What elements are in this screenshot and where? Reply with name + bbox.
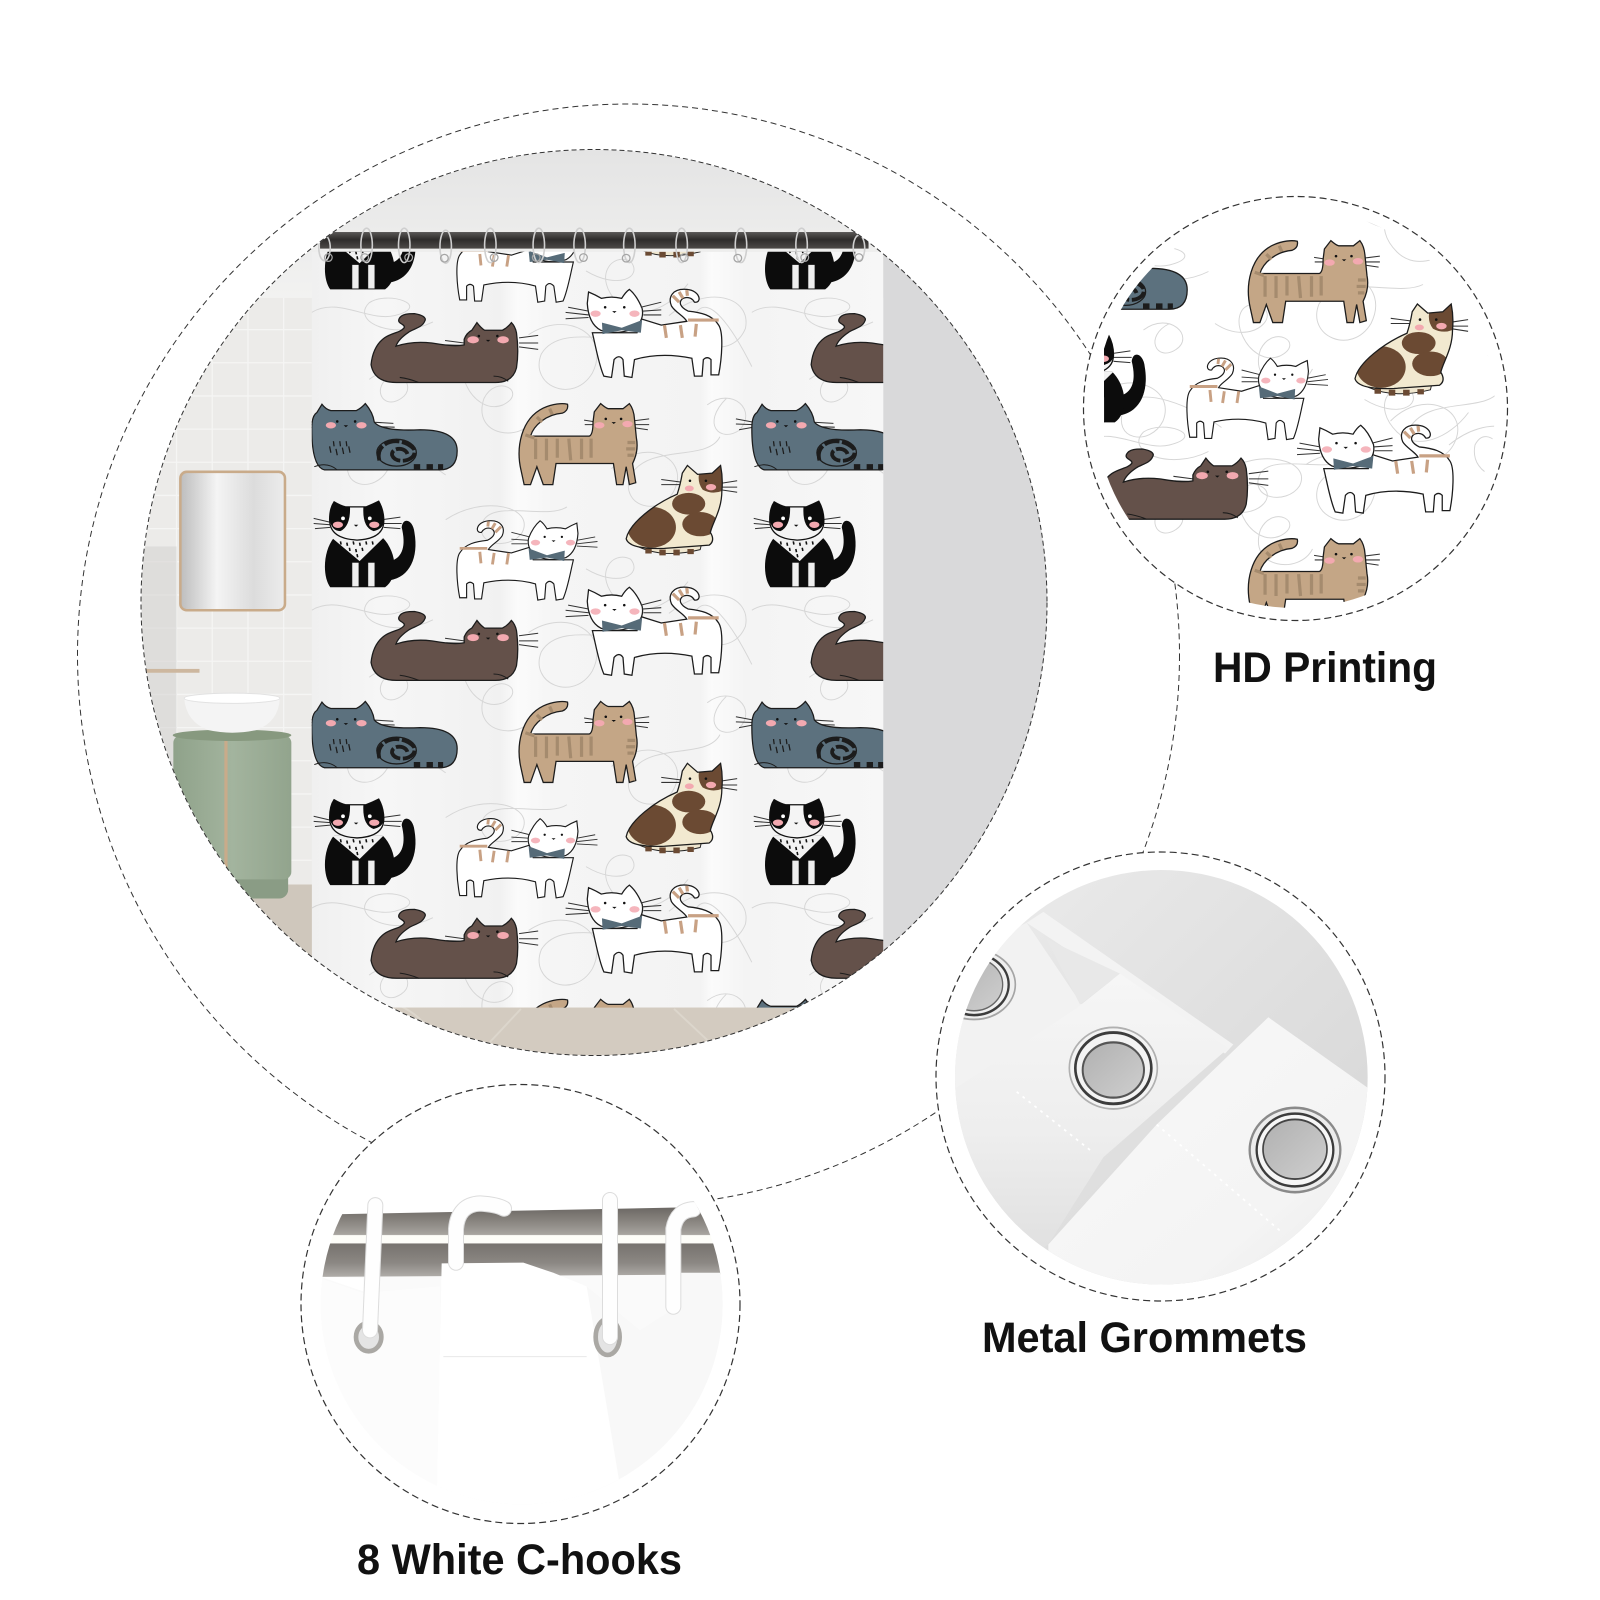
cats: calico <box>626 168 737 853</box>
grommet right <box>1250 1108 1340 1192</box>
grommet close-up photo <box>933 866 1373 1288</box>
middle flap <box>956 980 1223 1190</box>
connector: large dashed circle <box>78 104 1180 1206</box>
grommet circle outline <box>936 852 1385 1301</box>
white C-hooks <box>370 1200 693 1337</box>
cats: grey lying <box>296 404 897 1066</box>
curtain white background <box>317 1273 730 1509</box>
photo: tiled wall <box>142 298 312 884</box>
front flap <box>1048 1017 1373 1288</box>
hook circle outline <box>301 1084 740 1524</box>
metal rod <box>317 1207 727 1277</box>
panel: metal grommets <box>933 852 1385 1301</box>
photo: grey right wall <box>883 254 1048 951</box>
stitching <box>1017 1092 1283 1234</box>
grommet left <box>963 954 1016 1020</box>
fabric wedge <box>1066 948 1120 1004</box>
HD printed cats <box>1104 222 1494 608</box>
photo: mirror <box>180 472 285 610</box>
folded band <box>1027 912 1233 1054</box>
cats: brown lying <box>371 314 978 978</box>
HD circle outline <box>1084 196 1508 620</box>
label: 8 White C-hooks: 8 White C-hooks <box>357 1536 682 1584</box>
scribble background pattern <box>312 259 1192 1139</box>
cats: white facing right <box>457 223 597 898</box>
metal grommets on curtain <box>356 1319 620 1355</box>
photo: floor <box>240 884 797 1056</box>
label: HD Printing: HD Printing <box>1213 644 1437 692</box>
photo: green vanity <box>173 730 291 899</box>
panel: main curtain photo <box>140 149 1048 1056</box>
curtain folds <box>441 1262 720 1357</box>
grommet middle <box>1069 1027 1157 1109</box>
photo: white sink bowl <box>184 693 280 733</box>
cats: tan striped <box>519 404 649 1080</box>
cats: black and white <box>314 203 856 885</box>
main circle dashed outline <box>141 150 1047 1056</box>
hook close-up photo <box>322 1192 720 1358</box>
left flap <box>950 923 1082 1092</box>
curtain with cat print <box>312 252 884 1008</box>
photo: bathroom wall <box>260 150 880 298</box>
curtain rod <box>320 232 869 249</box>
panel: HD printing <box>1082 196 1508 622</box>
label: Metal Grommets: Metal Grommets <box>982 1314 1307 1362</box>
back fabric <box>1020 870 1368 1284</box>
photo: shelf line <box>145 669 199 673</box>
curtain rings <box>319 228 865 263</box>
panel: white C-hooks <box>301 1084 740 1524</box>
cats: white facing left <box>566 289 722 973</box>
hook shadow edges <box>370 1200 693 1337</box>
curtain fabric <box>312 252 883 1008</box>
